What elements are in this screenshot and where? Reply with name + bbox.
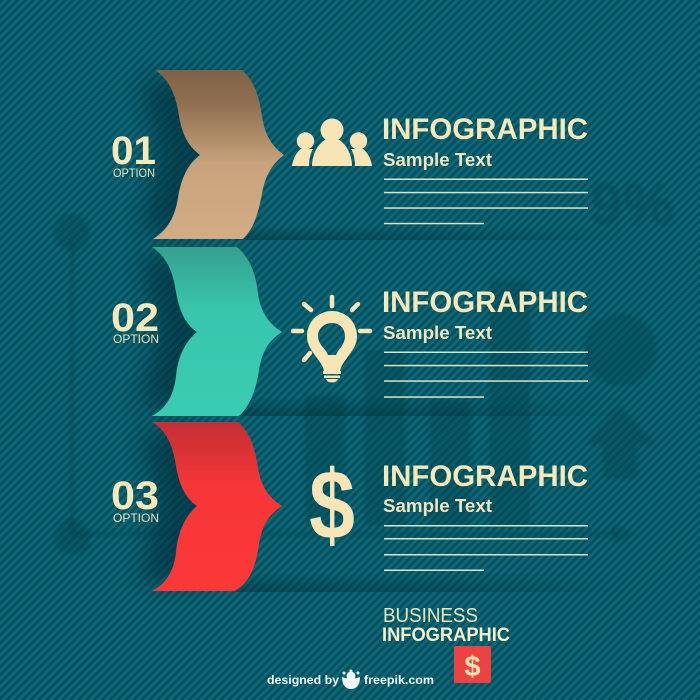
label: option: OPTION (113, 334, 159, 346)
heading: INFOGRAPHIC (382, 286, 588, 319)
icon: light bulb (293, 297, 370, 382)
footer logo: business infographic (382, 605, 510, 683)
subheading: Sample Text (383, 149, 492, 170)
label: option: OPTION (113, 513, 159, 525)
credit text: freepik.com: freepik.com (364, 673, 434, 687)
heading: INFOGRAPHIC (382, 460, 588, 493)
credit: designed by freepik.com (267, 670, 434, 689)
ribbon: brown (153, 70, 284, 239)
text lines (384, 178, 588, 224)
credit text: designed by: designed by (267, 673, 339, 687)
subheading: Sample Text (383, 322, 492, 343)
background: ghosted chart watermark: 9% (590, 172, 674, 237)
number 02: 02 (111, 296, 159, 340)
number 03: 03 (111, 474, 159, 518)
number 01: 01 (111, 129, 156, 173)
ribbon: red (152, 422, 282, 591)
shadows behind ribbons (140, 80, 620, 592)
row 3: option 03 (111, 422, 588, 591)
row 2: option 02 (111, 247, 588, 416)
subheading: Sample Text (383, 495, 492, 516)
background: ghosted chart watermark (54, 172, 674, 555)
label: option: OPTION (113, 168, 155, 180)
text lines (384, 352, 588, 398)
row 1: option 01 (111, 70, 588, 239)
icon: people (292, 118, 372, 166)
logo text: business: BUSINESS (383, 605, 478, 627)
icon: red dollar square: $ (464, 651, 481, 683)
icon: dollar sign: $ (309, 451, 355, 560)
icon: freepik logo (342, 670, 360, 689)
heading: INFOGRAPHIC (382, 113, 588, 146)
text lines (384, 525, 588, 571)
logo text: infographic: INFOGRAPHIC (382, 625, 510, 646)
ribbon: teal (152, 247, 282, 416)
